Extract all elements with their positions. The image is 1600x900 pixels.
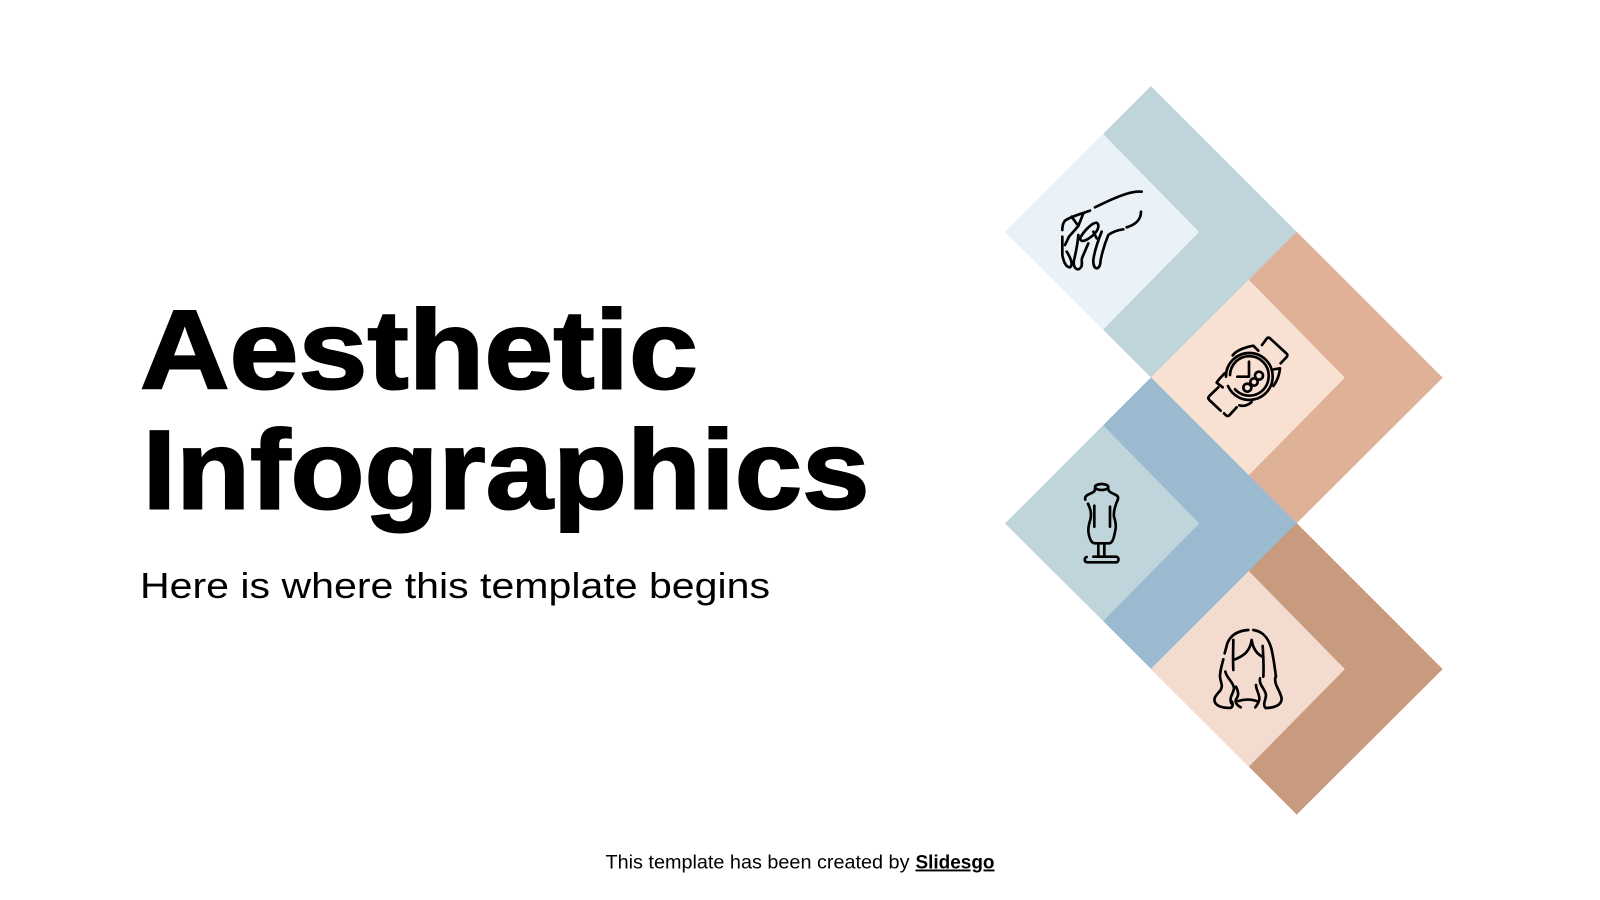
title: Aesthetic	[140, 288, 698, 412]
panel: hand	[1005, 86, 1297, 378]
icon: hand	[1062, 192, 1142, 269]
diagram: chevron stack	[1005, 86, 1443, 815]
footer credit: This template has been created by	[606, 852, 910, 874]
panel: hair	[1151, 523, 1443, 815]
footer credit: Slidesgo	[916, 852, 994, 874]
icon: watch	[1208, 338, 1287, 416]
icon: mannequin	[1085, 484, 1118, 562]
icon: hair	[1214, 630, 1282, 708]
panel: mannequin	[1005, 377, 1297, 669]
title	[140, 288, 870, 532]
title: Infographics	[142, 408, 870, 532]
subtitle: Here is where this template begins	[140, 565, 770, 606]
panel: watch	[1151, 232, 1443, 523]
